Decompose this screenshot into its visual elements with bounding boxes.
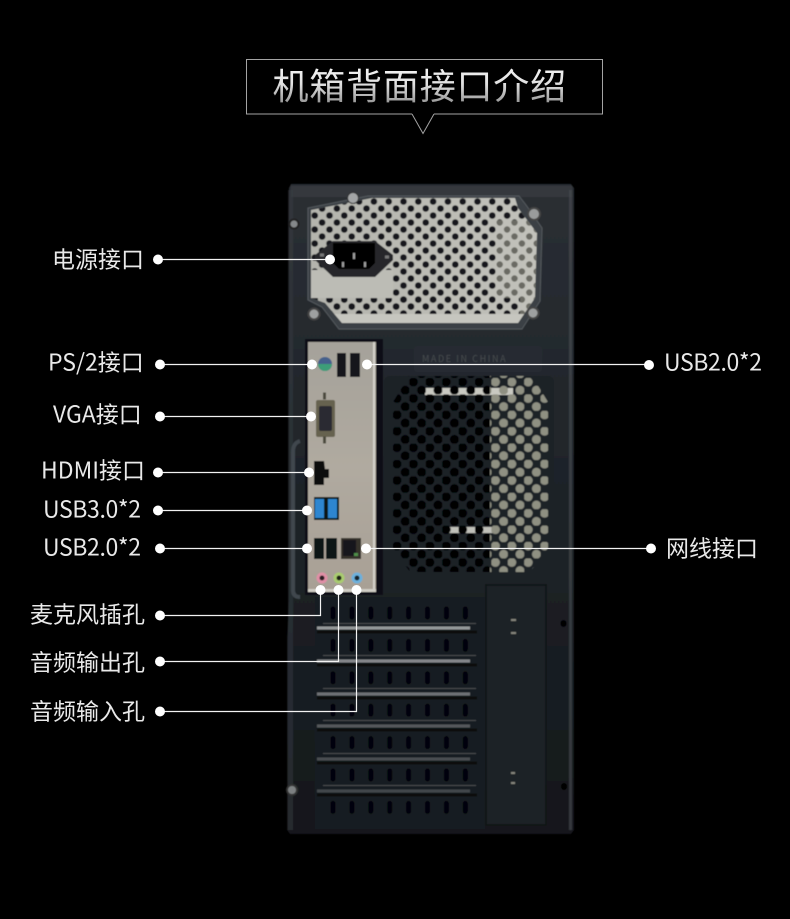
- slot bar 1: [317, 626, 470, 630]
- right panel holes: [560, 623, 567, 787]
- leader line: [158, 472, 309, 474]
- screw: top: [348, 192, 358, 204]
- title box: [246, 60, 602, 114]
- screw: psu bottom right: [528, 308, 538, 318]
- text: 音频输入孔: [30, 692, 145, 726]
- title text: 机箱背面接口介绍: [272, 58, 567, 110]
- screw: left upper: [290, 220, 298, 228]
- usb3 right blue: [328, 499, 337, 518]
- fan plate: [384, 376, 554, 576]
- text: 电源接口: [52, 240, 144, 274]
- shield plate: [308, 342, 376, 592]
- hdmi port: [314, 461, 329, 485]
- label: 音频输出孔: [30, 585, 344, 678]
- start dot: [153, 254, 163, 264]
- power socket: [315, 241, 393, 277]
- psu plate: [311, 198, 539, 324]
- text: HDMI接口: [41, 452, 145, 486]
- text: 音频输出孔: [30, 644, 145, 678]
- psu mesh panel: [311, 198, 539, 324]
- plate text: MADE IN CHINA: [422, 352, 507, 365]
- text: USB3.0*2: [43, 490, 141, 524]
- leader line: [367, 364, 649, 366]
- leader line: [160, 590, 338, 662]
- slot area: [315, 597, 485, 829]
- shield bottom edge: [308, 589, 376, 592]
- fan mesh: [393, 376, 548, 572]
- start dot: [155, 610, 165, 620]
- slot bar 5: [317, 758, 470, 760]
- end dot: [307, 360, 317, 370]
- socket screws: [320, 255, 389, 257]
- psu right holes: [496, 198, 539, 314]
- side curved slot: [293, 441, 300, 597]
- socket cavity: [333, 243, 375, 269]
- leader line: [158, 510, 307, 512]
- start dot: [155, 412, 165, 422]
- usb3 housing: [314, 497, 339, 520]
- start dot: [155, 544, 165, 554]
- start dot: [153, 468, 163, 478]
- lan led: [354, 553, 358, 556]
- end dot: [302, 544, 312, 554]
- fan light holes: [490, 376, 548, 572]
- psu plain area below plug: [311, 270, 393, 298]
- psu hole pattern: [311, 198, 496, 314]
- case left edge: [288, 190, 293, 830]
- leader line: [160, 548, 307, 550]
- audio in jack: [353, 574, 361, 582]
- start dot: [155, 706, 165, 716]
- slot shadow lines: [317, 632, 477, 795]
- screw: psu bottom left: [308, 308, 320, 320]
- socket pins: [343, 253, 365, 267]
- case right edge: [569, 190, 572, 830]
- computer case rear photo: [287, 184, 574, 834]
- fan bright band top: [425, 388, 513, 395]
- fan vent: [384, 376, 554, 576]
- text: 网线接口: [666, 530, 758, 564]
- slot bar 3: [317, 692, 470, 696]
- start dot: [155, 360, 165, 370]
- slot thin rails: [323, 624, 476, 786]
- vga socket: [319, 406, 332, 431]
- lan port: [341, 538, 361, 559]
- mic jack: [318, 574, 326, 582]
- end dot: [352, 585, 362, 595]
- slot bar 2: [317, 660, 470, 662]
- label: 音频输入孔: [30, 585, 362, 726]
- leader line: [158, 258, 330, 260]
- lan socket: [343, 540, 356, 556]
- usb 3.0 ports: [314, 497, 339, 520]
- leader line: [160, 590, 356, 712]
- start dot: [644, 360, 654, 370]
- end dot: [316, 585, 326, 595]
- vga screws: [323, 396, 326, 440]
- made in china plate: [414, 346, 542, 372]
- i/o shield: [305, 339, 383, 595]
- lan shell: [341, 538, 361, 559]
- case body: [287, 184, 574, 834]
- audio out jack: [335, 574, 343, 582]
- label: 网线接口: [361, 530, 758, 564]
- end dot: [302, 506, 312, 516]
- label: USB3.0*2: [43, 490, 312, 524]
- text: VGA接口: [53, 396, 142, 430]
- end dot: [304, 468, 314, 478]
- screw: left lower: [287, 785, 297, 795]
- end dot: [361, 544, 371, 554]
- slot holes: [323, 600, 475, 827]
- label: VGA接口: [53, 396, 316, 430]
- fan bright band lower: [447, 527, 497, 533]
- label: PS/2接口: [48, 344, 317, 378]
- right lower panel: [486, 585, 546, 825]
- slot bars: [317, 626, 470, 792]
- text: 麦克风插孔: [30, 596, 145, 630]
- label: 电源接口: [52, 240, 335, 274]
- usb3 left blue: [315, 499, 324, 518]
- plate recess: [414, 346, 542, 372]
- text: USB2.0*2: [43, 528, 141, 562]
- psu bottom dark rows: [325, 298, 520, 314]
- screw: psu top right: [528, 208, 540, 220]
- leader line: [160, 416, 311, 418]
- label: 麦克风插孔: [30, 585, 326, 630]
- ps/2 green half: [318, 364, 332, 371]
- psu recess frame: [308, 196, 542, 329]
- psu top dark right holes: [496, 198, 526, 220]
- label: USB2.0*2 upper: [362, 344, 762, 378]
- leader line: [160, 364, 312, 366]
- start dot: [155, 656, 165, 666]
- start dot: [153, 506, 163, 516]
- fan dark holes: [393, 376, 490, 572]
- ps/2 port: [318, 357, 332, 371]
- title: [246, 58, 602, 134]
- label: HDMI接口: [41, 452, 314, 486]
- slot bar 6: [317, 790, 470, 792]
- title arrow: [412, 114, 434, 134]
- end dot: [306, 412, 316, 422]
- case top rail: [291, 186, 572, 197]
- leader line: [366, 548, 651, 550]
- vga shell: [316, 400, 335, 437]
- shield right edge: [373, 342, 375, 592]
- text: USB2.0*2: [664, 344, 762, 378]
- text: PS/2接口: [48, 344, 144, 378]
- lower usb 2.0 ports: [314, 538, 337, 559]
- socket flange: [315, 241, 393, 277]
- vga port: [316, 396, 335, 440]
- end dot: [362, 360, 372, 370]
- slot bar 4: [317, 724, 470, 728]
- right panel tabs: [511, 620, 516, 783]
- shield frame: [305, 339, 383, 595]
- end dot: [325, 254, 335, 264]
- start dot: [646, 544, 656, 554]
- ps/2 purple half: [318, 357, 332, 371]
- top usb ports: [337, 353, 360, 377]
- label: USB2.0*2 lower: [43, 528, 312, 562]
- psu plain strip bottom: [334, 314, 524, 324]
- leader line: [160, 590, 320, 616]
- expansion slots: [315, 597, 485, 829]
- end dot: [334, 585, 344, 595]
